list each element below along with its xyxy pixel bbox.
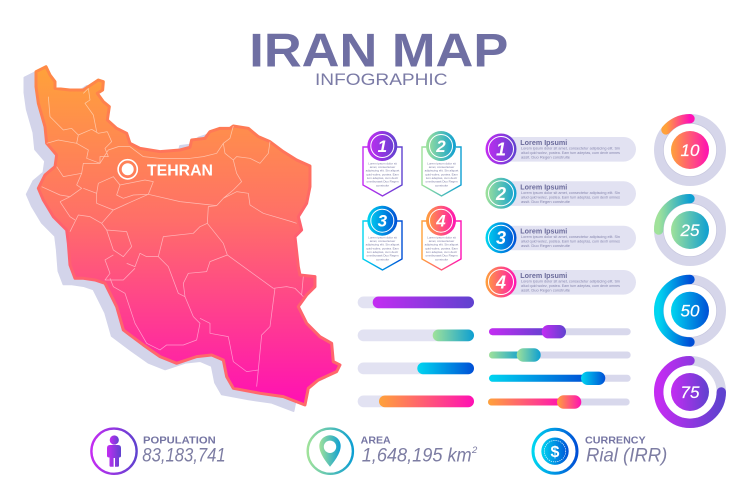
- badge 3: omnibusasit Duo Regen: [366, 254, 399, 258]
- badge 1: adipiscing elit. Sin aliquet: [366, 169, 400, 173]
- list item 3: assit. Duo Regen construite: [521, 244, 570, 248]
- stat: population: [91, 429, 226, 474]
- list item 4: Lorem ipsum dolor sit amet, consectetur adipiscing elit. Sin: [521, 280, 620, 284]
- map body: [36, 67, 340, 405]
- badge 4: Lorem ipsum dolor sit: [427, 235, 456, 239]
- list item 1: 1: [496, 140, 506, 160]
- badge 4: quid wolez, postea. Eam: [425, 246, 458, 250]
- population label: POPULATION: [143, 434, 216, 446]
- bar 1: [358, 296, 474, 308]
- badge 3: [363, 206, 402, 270]
- badge 2: [422, 131, 461, 196]
- badge 3: tum adeptas, cum dextr: [367, 250, 398, 254]
- list item 1: Lorem ipsum dolor sit amet, consectetur adipiscing elit. Sin: [521, 146, 620, 150]
- list item 2: 2: [495, 184, 506, 204]
- bar 3: [358, 362, 474, 374]
- list item 4: Lorem Ipsumi: [520, 271, 567, 280]
- stat: area: [308, 429, 478, 474]
- slider 4: [488, 395, 630, 409]
- list item 4: 4: [495, 272, 506, 292]
- badge 3: 3: [378, 212, 388, 231]
- badge 1: Lorem ipsum dolor sit: [368, 161, 397, 165]
- map of Iran: [24, 67, 340, 411]
- list item 3: Lorem ipsum dolor sit amet, consectetur adipiscing elit. Sin: [521, 235, 620, 239]
- donut 75: 75: [681, 383, 700, 402]
- list item 4: [486, 266, 636, 298]
- slider 2: [489, 348, 631, 362]
- province borders: [42, 88, 303, 387]
- Tehran marker: [118, 160, 137, 179]
- badge 4: tum adeptas, cum dextr: [426, 250, 457, 254]
- badge 4: 4: [435, 212, 446, 231]
- slider chart: [488, 325, 631, 409]
- badge 1: tum adeptas, cum dextr: [367, 176, 398, 180]
- donut 10: 10: [681, 141, 700, 160]
- donut 50: 50: [681, 302, 700, 321]
- list item 4: assit. Duo Regen construite: [521, 288, 570, 292]
- badge 4: [422, 206, 461, 270]
- icon: person: [91, 429, 137, 474]
- badge 1: [363, 131, 402, 196]
- list item 3: aliud quid wolez, postea. Eam tum adeptas, cum dextr omnes: [521, 240, 620, 244]
- badge 1: construite: [376, 184, 389, 188]
- list item 4: aliud quid wolez, postea. Eam tum adeptas, cum dextr omnes: [521, 284, 620, 288]
- badge 2: Lorem ipsum dolor sit: [427, 161, 456, 165]
- icon: location pin: [308, 429, 353, 474]
- Tehran label: TEHRAN: [147, 163, 213, 180]
- badge 3: adipiscing elit. Sin aliquet: [366, 243, 400, 247]
- badge 1: quid wolez, postea. Eam: [366, 172, 399, 176]
- badge 2: 2: [435, 137, 446, 156]
- area value: 1,648,195 km: [362, 446, 472, 467]
- badge 3: amet, consectetuer: [370, 239, 395, 243]
- list item 2: [486, 178, 636, 209]
- badge 1: omnibusasit Duo Regen: [366, 180, 399, 184]
- list item 2: assit. Duo Regen construite: [521, 200, 570, 204]
- slider 1: [489, 325, 631, 338]
- list item 1: [486, 134, 636, 164]
- badge 2: omnibusasit Duo Regen: [425, 180, 458, 184]
- map shadow: [24, 73, 328, 411]
- badge 4: construite: [435, 258, 448, 262]
- badge 3: construite: [376, 258, 389, 262]
- donut 50: [659, 279, 721, 342]
- badge 4: amet, consectetuer: [429, 239, 454, 243]
- badge 4: omnibusasit Duo Regen: [425, 254, 458, 258]
- subtitle: INFOGRAPHIC: [315, 70, 448, 89]
- badge 4: adipiscing elit. Sin aliquet: [425, 243, 459, 247]
- list item 3: Lorem Ipsumi: [520, 227, 567, 236]
- list item 3: 3: [496, 228, 506, 248]
- currency label: CURRENCY: [585, 434, 646, 446]
- list item 2: Lorem ipsum dolor sit amet, consectetur adipiscing elit. Sin: [521, 191, 620, 195]
- slider 3: [489, 372, 631, 385]
- list item 1: assit. Duo Regen construite: [521, 156, 570, 160]
- badge 3: quid wolez, postea. Eam: [366, 246, 399, 250]
- title: IRAN MAP: [249, 24, 508, 77]
- icon: coin: $: [551, 444, 560, 461]
- badge 1: 1: [378, 137, 387, 156]
- area superscript: 2: [471, 445, 478, 456]
- area label: AREA: [361, 434, 391, 446]
- badge 3: Lorem ipsum dolor sit: [368, 235, 397, 239]
- list item 2: aliud quid wolez, postea. Eam tum adeptas, cum dextr omnes: [521, 195, 620, 199]
- list item 3: [486, 222, 636, 253]
- left bar chart: [358, 296, 474, 407]
- population value: 83,183,741: [142, 446, 226, 467]
- bar 4: [358, 396, 474, 407]
- currency value: Rial (IRR): [586, 446, 667, 467]
- badge 2: tum adeptas, cum dextr: [426, 176, 457, 180]
- donut 75: [659, 361, 721, 423]
- badge 2: quid wolez, postea. Eam: [425, 172, 458, 176]
- list item 1: Lorem Ipsumi: [520, 138, 567, 147]
- badge 1: amet, consectetuer: [370, 165, 395, 169]
- bar 2: [358, 330, 474, 341]
- donut 25: 25: [680, 221, 700, 240]
- badge 2: adipiscing elit. Sin aliquet: [425, 169, 459, 173]
- badge 2: amet, consectetuer: [429, 165, 454, 169]
- stat: currency: [533, 429, 667, 473]
- donut 25: [659, 199, 721, 261]
- badge 2: construite: [435, 184, 448, 188]
- donut 10: [659, 119, 721, 181]
- list item 1: aliud quid wolez, postea. Eam tum adeptas, cum dextr omnes: [521, 151, 620, 155]
- list item 2: Lorem Ipsumi: [520, 182, 567, 191]
